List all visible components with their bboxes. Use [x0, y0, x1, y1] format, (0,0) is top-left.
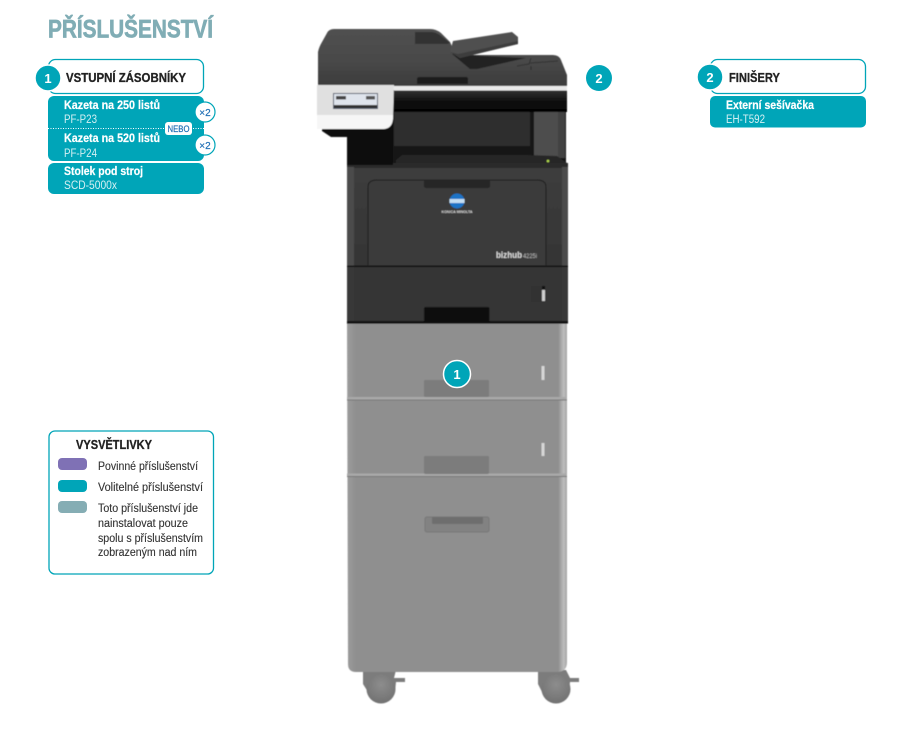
left column: [322, 125, 393, 165]
body cover: [347, 167, 568, 267]
inner cavity: [394, 112, 530, 146]
feeder recess: [415, 32, 450, 44]
output tray: [396, 155, 567, 163]
paper drawer: [347, 266, 568, 322]
legend item: conditional: nainstalovat pouze: [98, 518, 188, 530]
touch screen: [333, 93, 378, 109]
brand logo: KONICA MINOLTA: [442, 210, 473, 214]
legend heading: VYSVĚTLIVKY: [76, 437, 153, 452]
model name: 4225i: [523, 253, 537, 260]
marker 2 on printer: 2: [595, 71, 603, 86]
marker 1 on printer: 1: [453, 367, 461, 382]
marker 2 on printer: [586, 65, 612, 91]
legend item: mandatory: [58, 458, 199, 473]
paper gauge 2: [542, 443, 544, 456]
legend item: conditional: spolu s příslušenstvím: [98, 533, 203, 545]
marker 1 on printer: [444, 360, 470, 388]
option panel: paper cassettes: Kazeta na 250 listů: [64, 100, 160, 112]
drawer handle 1: [424, 380, 489, 397]
heading box: vstupní zásobníky: 1: [44, 71, 52, 86]
title: PŘÍSLUŠENSTVÍ: [48, 14, 214, 44]
heading box: finišery: 2: [706, 70, 714, 85]
legend item: mandatory: Povinné příslušenství: [98, 461, 199, 473]
main unit: [317, 29, 568, 324]
badge: times two, upper: ×2: [199, 108, 211, 119]
heading box: finišery: FINIŠERY: [729, 70, 781, 85]
paper gauge 1: [542, 366, 544, 380]
caster: right: [538, 670, 579, 704]
grey drawers: [347, 323, 567, 672]
heading box: vstupní zásobníky: VSTUPNÍ ZÁSOBNÍKY: [66, 70, 187, 85]
optional grey cabinet and casters: [347, 323, 579, 704]
legend item: conditional: zobrazeným nad ním: [98, 547, 197, 559]
output guide marks: [517, 58, 558, 70]
white strip: [394, 86, 567, 90]
printer illustration: [317, 29, 579, 704]
option panel: paper cassettes: PF-P24: [64, 148, 97, 160]
option panel: stapler: EH-T592: [726, 114, 765, 126]
document tray: [450, 32, 518, 58]
paper gauge: [531, 286, 546, 302]
badge: times two, upper: [195, 102, 215, 122]
legend item: conditional: [58, 501, 203, 559]
scanner lid grip: [417, 77, 468, 84]
option panel: stapler: Externí sešívačka: [726, 100, 815, 112]
status light: [547, 160, 549, 162]
panel: finišery: [697, 60, 866, 128]
badge: nebo: [165, 122, 192, 135]
right inner column: [534, 112, 565, 158]
badge: times two, lower: [195, 135, 215, 155]
front door outline: [368, 180, 546, 265]
option panel: paper cassettes: [48, 96, 204, 161]
caster: left: [363, 670, 405, 704]
option panel: stand: SCD-5000x: [64, 180, 117, 192]
legend item: conditional: Toto příslušenství jde: [98, 503, 198, 515]
option panel: stapler: [710, 96, 866, 128]
heading box: vstupní zásobníky: [35, 60, 204, 94]
scanner and document feeder: [318, 29, 567, 86]
badge: times two, lower: ×2: [199, 141, 211, 152]
control panel: [317, 85, 394, 129]
option panel: paper cassettes: Kazeta na 520 listů: [64, 133, 160, 145]
model name: bizhub: [496, 250, 522, 261]
brand logo: [442, 194, 473, 214]
drawer handle 2: [424, 456, 489, 474]
panel: vstupní zásobníky: [35, 60, 215, 194]
badge: nebo: NEBO: [168, 124, 190, 134]
paper drawer handle: [424, 307, 490, 322]
option panel: paper cassettes: PF-P23: [64, 114, 97, 126]
option panel: stand: [48, 163, 204, 194]
option panel: stand: Stolek pod stroj: [64, 166, 143, 178]
door handle: [424, 180, 490, 188]
legend item: optional: [58, 480, 204, 494]
legend item: optional: Volitelné příslušenství: [98, 482, 204, 494]
heading box: finišery: [697, 60, 866, 94]
black band: [394, 90, 567, 112]
back column: [347, 90, 566, 170]
panel: legend: [49, 431, 214, 574]
cabinet handle: [425, 517, 489, 532]
document tray shadow: [452, 54, 526, 69]
